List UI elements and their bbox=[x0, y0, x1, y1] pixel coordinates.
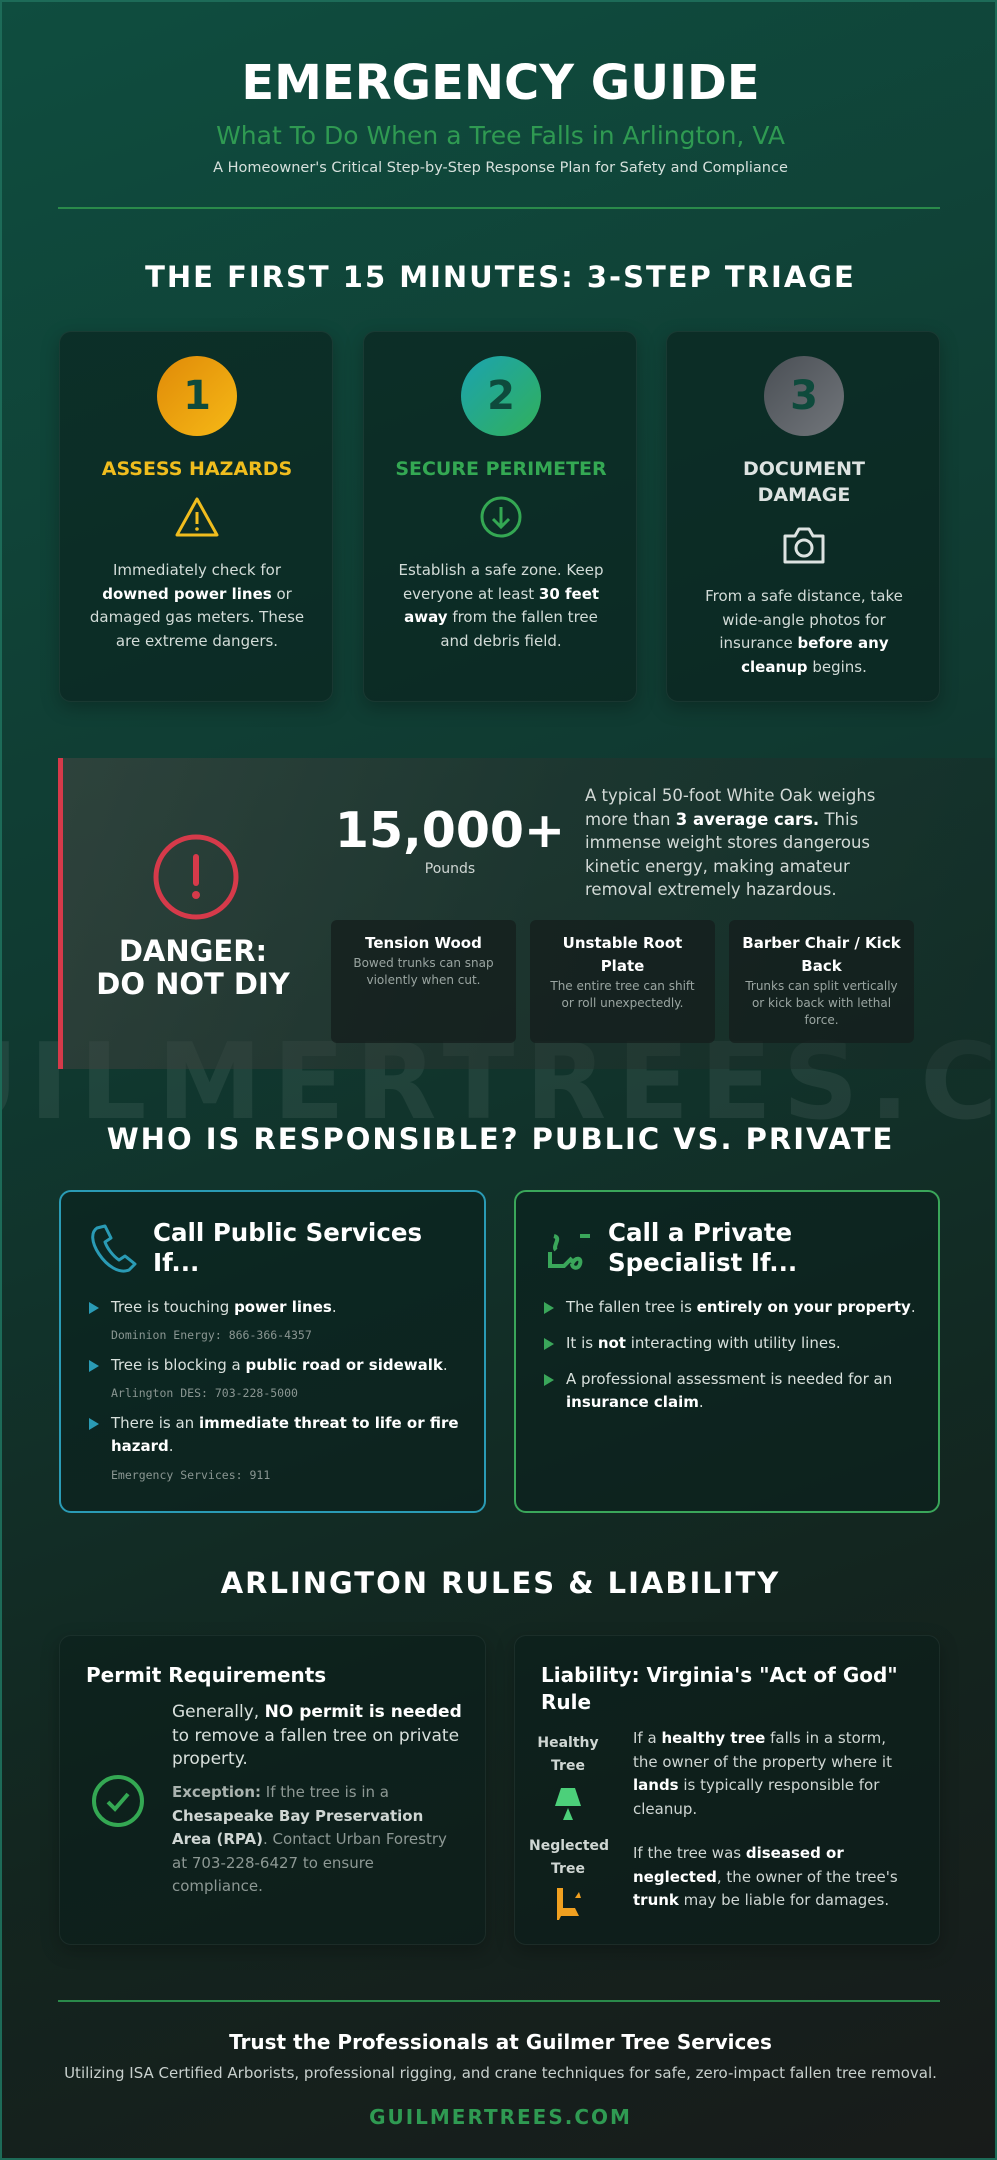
card title: DAMAGE bbox=[758, 484, 850, 506]
panel title bbox=[153, 1218, 422, 1277]
subcard: unstable root plate: Plate bbox=[601, 957, 644, 975]
neglected tree: Tree bbox=[551, 1861, 585, 1877]
number 2: 2 bbox=[487, 373, 515, 419]
heading: triage: THE FIRST 15 MINUTES: 3-STEP TRIAGE bbox=[145, 260, 856, 294]
card title: DOCUMENT bbox=[743, 458, 865, 480]
icon: camera bbox=[784, 528, 824, 564]
icon: warning bbox=[176, 497, 219, 536]
healthy tree: Tree bbox=[551, 1758, 585, 1774]
heading: responsibility: WHO IS RESPONSIBLE? PUBLIC VS. PRIVATE bbox=[107, 1122, 894, 1156]
panel: liability: If the tree was diseased or neglected, the owner of the tree's trunk may be liable for damages. bbox=[633, 1844, 898, 1909]
bullet 2 bbox=[544, 1338, 554, 1350]
panel: liability: If a healthy tree falls in a storm, the owner of the property where it lands is typically responsible for cleanup. bbox=[633, 1729, 892, 1818]
number 1 bbox=[157, 356, 237, 436]
subcard: barber chair: Back bbox=[801, 957, 842, 975]
text: Immediately check for downed power lines or damaged gas meters. These are extreme dangers. bbox=[90, 561, 304, 650]
danger heading bbox=[96, 934, 290, 1001]
bullet 1 bbox=[89, 1302, 99, 1314]
subcard: barber chair: Barber Chair / Kick bbox=[742, 934, 901, 952]
panel: private specialist: A professional assessment is needed for an insurance claim. bbox=[566, 1370, 892, 1411]
panel: public services: There is an immediate threat to life or fire hazard. bbox=[111, 1414, 459, 1455]
panel title bbox=[608, 1218, 797, 1277]
subtitle: What To Do When a Tree Falls in Arlington, VA bbox=[216, 121, 785, 150]
heading: rules: ARLINGTON RULES & LIABILITY bbox=[221, 1566, 780, 1600]
icon: down arrow circle bbox=[480, 496, 522, 538]
neglected tree: Neglected bbox=[529, 1838, 609, 1854]
card title: ASSESS HAZARDS bbox=[102, 458, 292, 480]
panel title: Specialist If... bbox=[608, 1248, 797, 1277]
panel: public services: Arlington DES: 703-228-5000 bbox=[111, 1386, 298, 1400]
stat: 15,000+: Pounds bbox=[425, 861, 475, 877]
panel: public services: Dominion Energy: 866-366-4357 bbox=[111, 1328, 312, 1342]
danger heading: DANGER: bbox=[119, 934, 267, 968]
bullet 2 bbox=[89, 1360, 99, 1372]
permit text: Generally, NO permit is needed to remove a fallen tree on private property. bbox=[172, 1702, 462, 1769]
panel title: Liability: Virginia's "Act of God" Rule bbox=[541, 1663, 898, 1714]
icon: chainsaw bbox=[548, 1234, 590, 1270]
number 3 bbox=[764, 356, 844, 436]
healthy tree: Healthy bbox=[537, 1735, 599, 1751]
number 1: 1 bbox=[183, 373, 211, 419]
tagline: A Homeowner's Critical Step-by-Step Response Plan for Safety and Compliance bbox=[213, 160, 788, 176]
card 3: document damage bbox=[666, 331, 940, 702]
number 3: 3 bbox=[790, 373, 818, 419]
panel: private specialist: The fallen tree is entirely on your property. bbox=[566, 1298, 916, 1316]
subcard: barber chair: Trunks can split vertically or kick back with lethal force. bbox=[745, 979, 898, 1027]
weight paragraph: A typical 50-foot White Oak weighs more than 3 average cars. This immense weight stores dangerous kinetic energy, making amateur removal extremely hazardous. bbox=[585, 786, 875, 899]
subcard: tension wood: Tension Wood bbox=[365, 934, 482, 952]
card title bbox=[743, 458, 865, 506]
panel: public services: Tree is touching power lines. bbox=[111, 1298, 337, 1316]
bullet 1 bbox=[544, 1302, 554, 1314]
danger heading: DO NOT DIY bbox=[96, 967, 290, 1001]
subcard: tension wood bbox=[331, 920, 516, 1043]
neglected tree bbox=[529, 1838, 609, 1877]
panel title: Permit Requirements bbox=[86, 1663, 326, 1687]
stat: 15,000+: 15,000+ bbox=[335, 802, 565, 859]
footer heading: Trust the Professionals at Guilmer Tree Services bbox=[229, 2030, 772, 2054]
footer url: GUILMERTREES.COM bbox=[369, 2105, 632, 2129]
subcard: barber chair bbox=[729, 920, 914, 1043]
panel title: If... bbox=[153, 1248, 199, 1277]
subcard: unstable root plate bbox=[530, 920, 715, 1043]
panel title: Call Public Services bbox=[153, 1218, 422, 1247]
panel: public services bbox=[59, 1190, 486, 1513]
icon: phone bbox=[91, 1224, 136, 1273]
panel: permit requirements bbox=[59, 1635, 486, 1945]
title: EMERGENCY GUIDE bbox=[241, 55, 760, 111]
subcard: tension wood: Bowed trunks can snap violently when cut. bbox=[353, 956, 494, 987]
panel title: Call a Private bbox=[608, 1218, 792, 1247]
card title: SECURE PERIMETER bbox=[395, 458, 607, 480]
panel: public services: Emergency Services: 911 bbox=[111, 1468, 270, 1482]
card 2: secure perimeter bbox=[363, 331, 637, 702]
bullet 3 bbox=[544, 1374, 554, 1386]
panel: liability bbox=[514, 1635, 940, 1945]
subcard: unstable root plate: Unstable Root bbox=[563, 934, 682, 952]
text: From a safe distance, take wide-angle photos for insurance before any cleanup begins. bbox=[705, 587, 903, 676]
bullet 3 bbox=[89, 1418, 99, 1430]
number 2 bbox=[461, 356, 541, 436]
panel: private specialist: It is not interacting with utility lines. bbox=[566, 1334, 841, 1352]
footer text: Utilizing ISA Certified Arborists, professional rigging, and crane techniques for safe, zero-impact fallen tree removal. bbox=[64, 2064, 937, 2082]
card 1: assess hazards bbox=[59, 331, 333, 702]
healthy tree bbox=[537, 1735, 599, 1774]
icon: danger bbox=[154, 834, 238, 920]
exception text: Exception: If the tree is in a Chesapeake Bay Preservation Area (RPA). Contact Urban Forestry at 703-228-6427 to ensure compliance. bbox=[172, 1783, 447, 1895]
subcard: unstable root plate: The entire tree can shift or roll unexpectedly. bbox=[550, 979, 695, 1010]
panel: public services: Tree is blocking a public road or sidewalk. bbox=[111, 1356, 448, 1374]
panel: private specialist bbox=[514, 1190, 940, 1513]
panel: danger do not diy bbox=[58, 758, 997, 1069]
text: Establish a safe zone. Keep everyone at least 30 feet away from the fallen tree and debris field. bbox=[399, 561, 603, 650]
icon: check bbox=[92, 1775, 144, 1827]
